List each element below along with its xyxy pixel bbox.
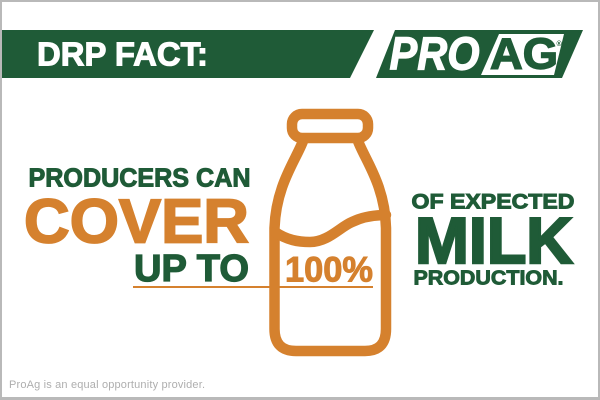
header banner (2, 30, 374, 78)
bottle body (274, 141, 386, 351)
logo: ProAg (376, 28, 583, 80)
underline rule (133, 286, 373, 288)
text: milk: MILK (415, 204, 573, 277)
footer disclaimer: ProAg is an equal opportunity provider. (9, 379, 205, 391)
text: up to: UP TO (134, 248, 249, 290)
text: production: PRODUCTION. (414, 268, 564, 290)
text: cover: COVER (24, 188, 249, 256)
text: producers can: PRODUCERS CAN (28, 164, 250, 192)
left text block (24, 164, 250, 290)
heading: DRP Fact: DRP FACT: (37, 36, 208, 72)
right text block (412, 190, 574, 290)
icon: milk bottle (274, 114, 386, 351)
logo: ProAg: ® (556, 40, 562, 48)
bottle cap (292, 114, 368, 138)
milk level wave (275, 215, 386, 242)
logo: ProAg: AG (490, 30, 558, 78)
logo: ProAg: PRO (390, 28, 480, 80)
text: of expected: OF EXPECTED (412, 190, 574, 214)
text: 100%: 100% (285, 250, 373, 290)
